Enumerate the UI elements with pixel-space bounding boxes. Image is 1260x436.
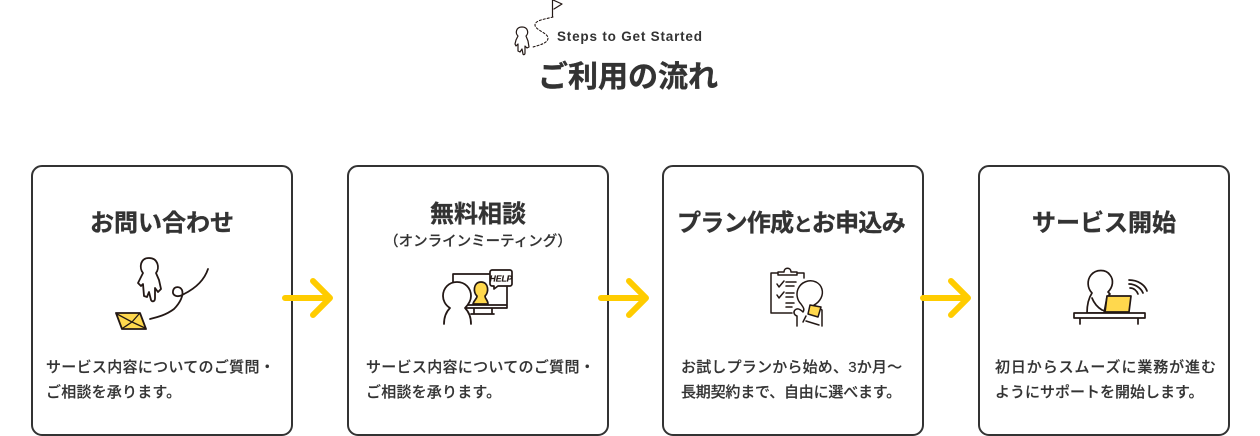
- panel: step 3 plan: [662, 165, 924, 436]
- step 4 text: [995, 359, 1217, 401]
- title: ご利用の流れ: [538, 61, 718, 94]
- step 2 text: サービス内容についてのご質問・: [366, 359, 595, 376]
- icon: person with envelope: [115, 257, 209, 330]
- panel: step 1 inquiry: [31, 165, 293, 436]
- step 1 text: サービス内容についてのご質問・: [46, 359, 275, 376]
- panel: step 2 consultation: [347, 165, 609, 436]
- step 1 text: [46, 359, 275, 401]
- step 2 text: ご相談を承ります。: [366, 384, 501, 401]
- step 1 heading: お問い合わせ: [90, 210, 234, 237]
- icon: person at laptop with wifi: [1073, 270, 1148, 325]
- step 3 heading: プラン作成とお申込み: [677, 210, 905, 237]
- step 1 text: ご相談を承ります。: [46, 384, 181, 401]
- arrow 1: [282, 278, 333, 318]
- icon: online meeting: [442, 269, 513, 325]
- step 4 heading: サービス開始: [1032, 210, 1176, 237]
- step 2 text: [366, 359, 595, 401]
- step 3 text: お試しプランから始め、3か月～: [681, 359, 902, 376]
- step 4 text: ようにサポートを開始します。: [995, 384, 1204, 401]
- step 2 subheading: （オンラインミーティング）: [384, 234, 572, 250]
- subtitle: Steps to Get Started: [557, 29, 703, 44]
- arrow 2: [598, 278, 649, 318]
- step 2 heading: 無料相談: [430, 201, 526, 228]
- panel: step 4 service start: [978, 165, 1230, 436]
- header icon: person and dotted path to flag: [514, 0, 563, 56]
- icon: checklist and person: [770, 268, 824, 327]
- step 4 text: 初日からスムーズに業務が進む: [995, 359, 1217, 376]
- arrow 3: [920, 278, 971, 318]
- step 3 text: 長期契約まで、自由に選べます。: [681, 384, 901, 401]
- icon label: help: HELP: [490, 274, 513, 284]
- step 3 text: [681, 359, 902, 401]
